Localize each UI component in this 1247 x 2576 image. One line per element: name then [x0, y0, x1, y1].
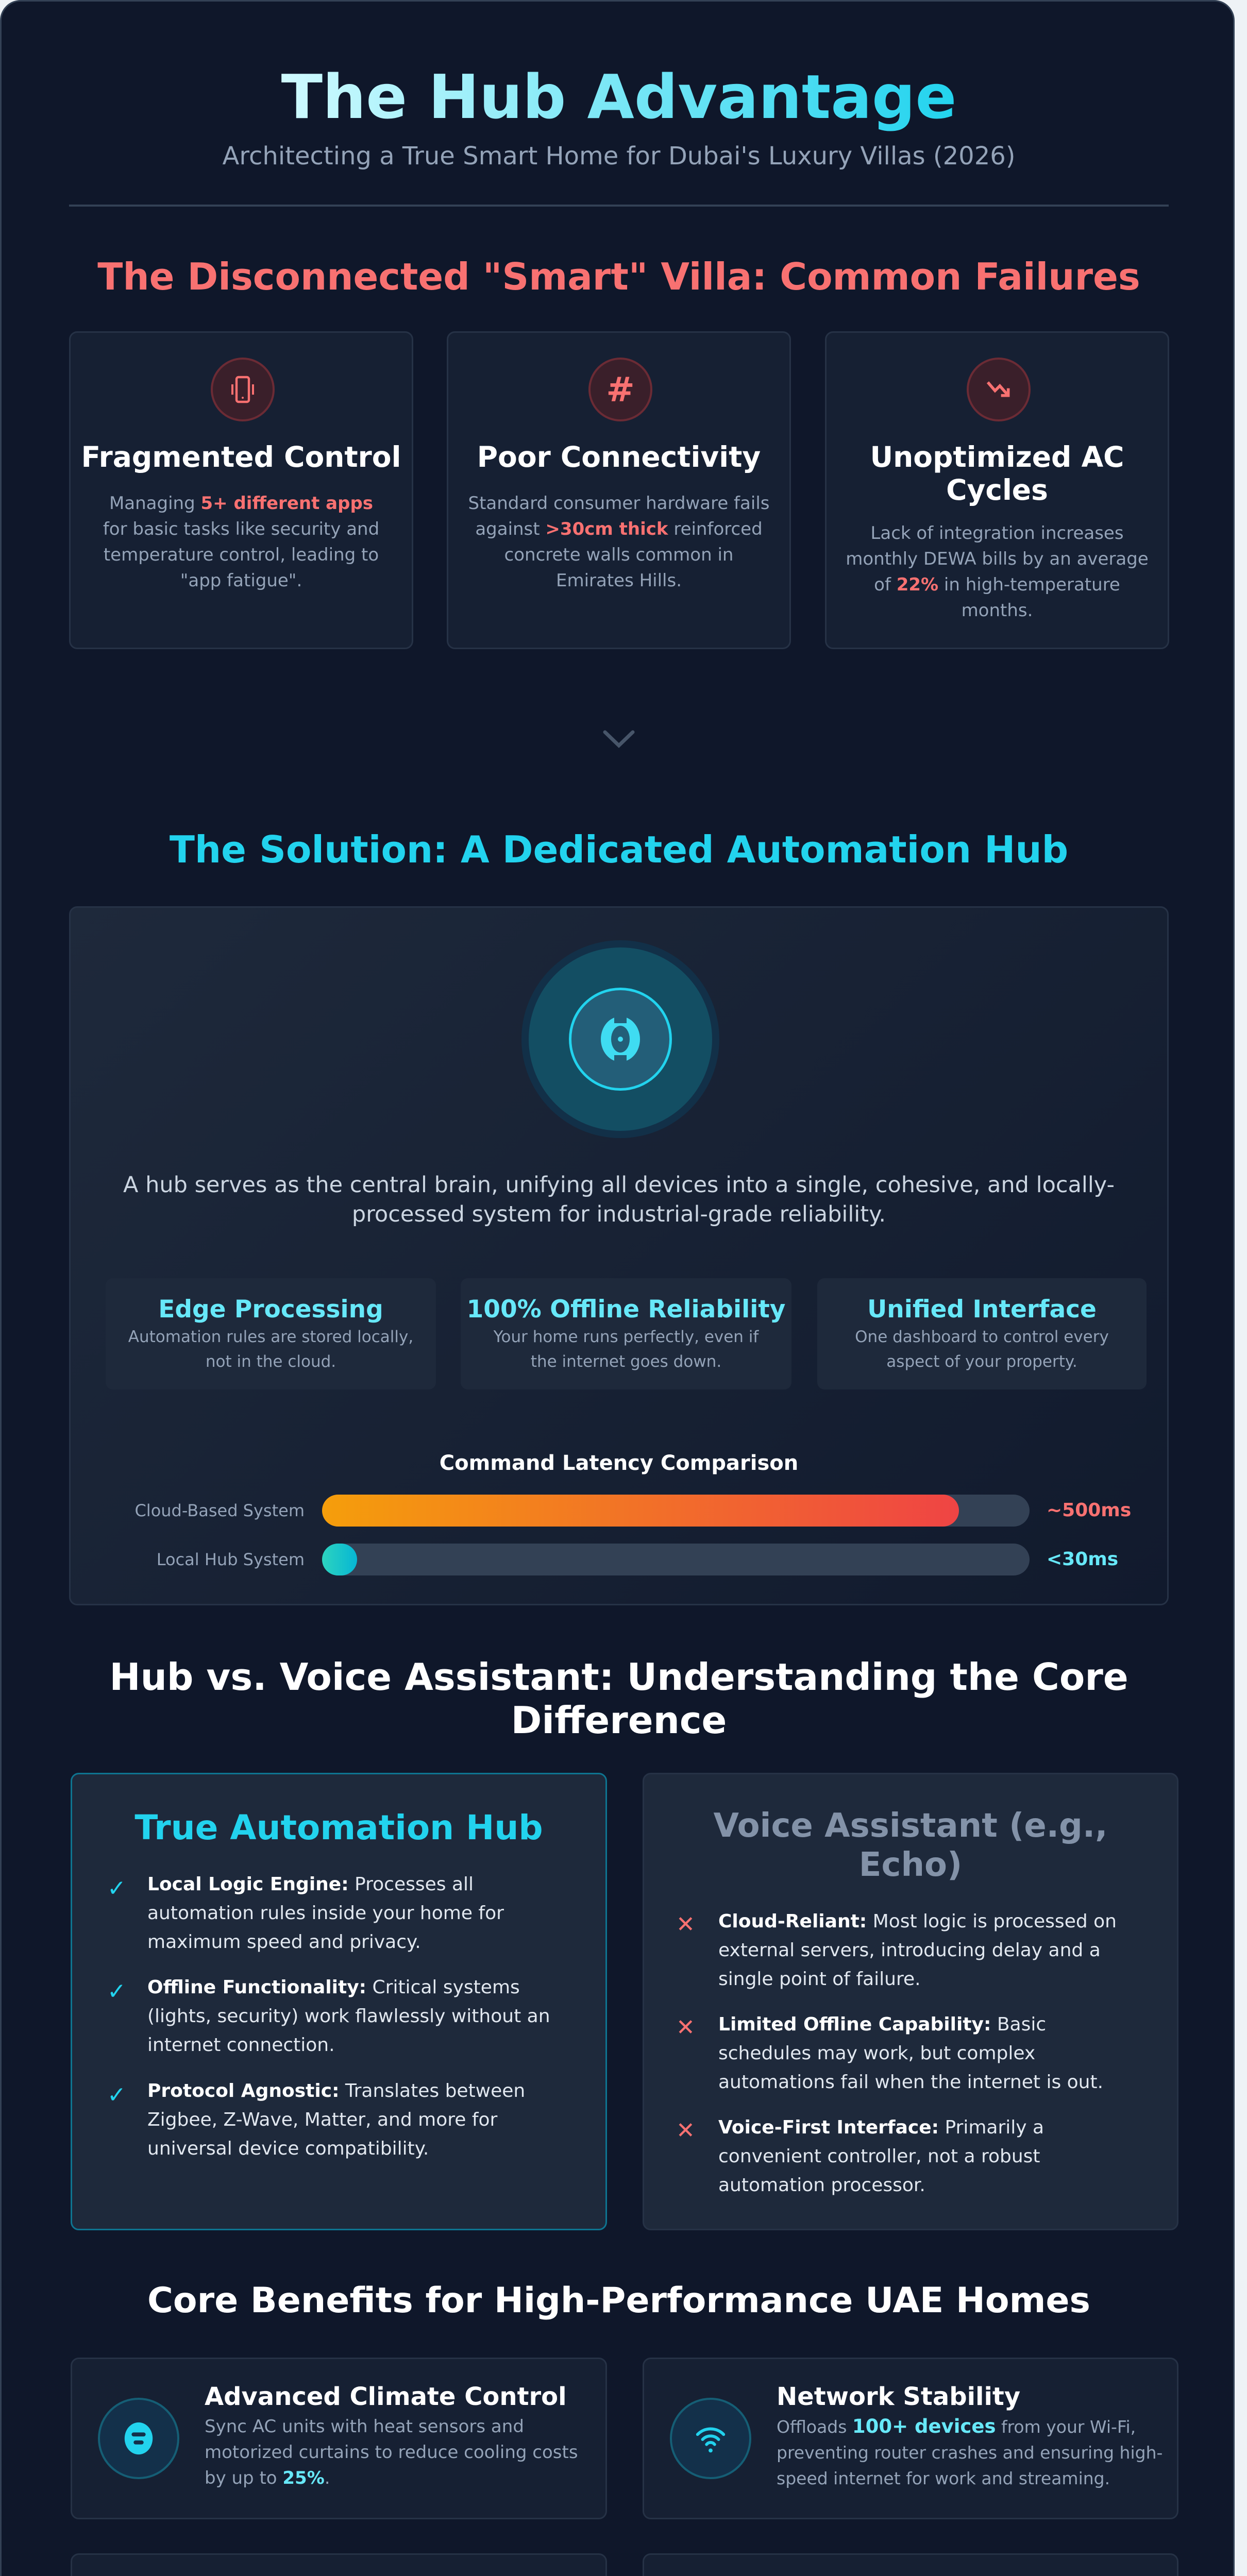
list item: local logic: ✓: [107, 1875, 126, 1902]
chart: latency comparison: [134, 1451, 1131, 1575]
heading: common failures: The Disconnected "Smart" Villa: Common Failures: [97, 255, 1140, 298]
panel: data security: [71, 2553, 607, 2576]
panel: network stability: Offloads 100+ devices from your Wi-Fi,: [777, 2415, 1136, 2437]
panel: network stability: preventing router crashes and ensuring high-: [777, 2443, 1162, 2463]
chart: latency comparison: ~500ms: [1047, 1500, 1131, 1521]
list item: limited offline: ✕: [676, 2014, 695, 2041]
chart: latency comparison: Command Latency Comparison: [440, 1451, 798, 1475]
icon: trend down: [967, 358, 1031, 421]
icon: hash: #: [606, 370, 635, 409]
icon: hash: [588, 358, 652, 421]
chart: latency comparison: Local Hub System: [157, 1550, 305, 1569]
feature: unified interface: [817, 1278, 1147, 1389]
panel: fragmented control: Fragmented Control: [81, 440, 401, 473]
icon: hub: [521, 940, 719, 1138]
heading: solution: The Solution: A Dedicated Automation Hub: [170, 828, 1068, 871]
feature: edge processing: Automation rules are stored locally,: [128, 1328, 413, 1346]
feature: offline reliability: 100% Offline Reliability: [467, 1295, 785, 1324]
list item: protocol: ✓: [107, 2082, 126, 2108]
chart: latency comparison: <30ms: [1047, 1549, 1118, 1570]
panel: unoptimized AC: Unoptimized AC: [870, 440, 1124, 473]
panel: fragmented control: "app fatigue".: [180, 570, 302, 591]
panel: unoptimized AC: months.: [962, 600, 1033, 621]
panel: climate control: motorized curtains to reduce cooling costs: [205, 2442, 578, 2463]
list item: protocol: Protocol Agnostic: Translates between Zigbee, Z-Wave, Matter, and more for universal device compatibility.: [147, 2080, 525, 2159]
feature: unified interface: Unified Interface: [867, 1295, 1097, 1324]
panel: poor connectivity: concrete walls common in: [504, 545, 733, 565]
feature: offline reliability: [461, 1278, 791, 1389]
panel: climate control: Advanced Climate Control: [205, 2382, 567, 2411]
panel: poor connectivity: against >30cm thick reinforced: [475, 519, 763, 539]
icon: climate: [98, 2398, 179, 2479]
panel: fragmented control: temperature control, leading to: [104, 545, 379, 565]
panel: unoptimized AC: Lack of integration increases: [870, 523, 1124, 544]
feature: edge processing: Edge Processing: [158, 1295, 383, 1324]
list item: local logic: Local Logic Engine: Processes all automation rules inside your home for maximum speed and privacy.: [147, 1874, 504, 1953]
heading: hub vs voice: Hub vs. Voice Assistant: Understanding the Core Difference: [109, 1655, 1128, 1742]
panel: fragmented control: [69, 331, 413, 649]
panel: climate control: [71, 2358, 607, 2519]
list item: cloud reliant: ✕: [676, 1911, 695, 1938]
feature: offline reliability: Your home runs perfectly, even if: [494, 1328, 759, 1346]
panel: solution: [69, 906, 1169, 1605]
list item: voice first: Voice-First Interface: Primarily a convenient controller, not a robust automation processor.: [718, 2117, 1044, 2196]
panel: climate control: Sync AC units with heat sensors and: [205, 2416, 524, 2437]
panel: unoptimized AC: monthly DEWA bills by an average: [846, 549, 1149, 569]
feature: unified interface: aspect of your property.: [886, 1352, 1077, 1371]
heading: core benefits: Core Benefits for High-Performance UAE Homes: [147, 2280, 1090, 2321]
arrow: chevron down: [603, 731, 635, 748]
list item: voice first: ✕: [676, 2117, 695, 2144]
list item: offline: ✓: [107, 1978, 126, 2005]
panel: protocols: [643, 2553, 1178, 2576]
feature: unified interface: One dashboard to control every: [855, 1328, 1109, 1346]
icon: wifi: [670, 2398, 751, 2479]
panel: unoptimized AC: of 22% in high-temperature: [874, 574, 1120, 595]
panel: voice assistant: [643, 1773, 1178, 2230]
title: The Hub Advantage: [281, 61, 956, 132]
panel: climate control: by up to 25%.: [205, 2468, 330, 2488]
list item: cloud reliant: Cloud-Reliant: Most logic is processed on external servers, introducing delay and a single point of failure.: [718, 1911, 1117, 1990]
panel: poor connectivity: Poor Connectivity: [477, 440, 761, 473]
text: hub description: processed system for industrial-grade reliability.: [352, 1201, 886, 1227]
panel: fragmented control: for basic tasks like security and: [103, 519, 379, 539]
subtitle: Architecting a True Smart Home for Dubai's Luxury Villas (2026): [223, 142, 1015, 171]
panel: poor connectivity: [447, 331, 791, 649]
panel: true automation hub: [71, 1773, 607, 2230]
panel: fragmented control: Managing 5+ different apps: [109, 493, 373, 514]
panel: voice assistant: Voice Assistant (e.g., Echo): [714, 1807, 1107, 1884]
panel: unoptimized AC: Cycles: [946, 473, 1048, 506]
panel: network stability: [643, 2358, 1178, 2519]
feature: offline reliability: the internet goes down.: [531, 1352, 721, 1371]
icon: phone: [211, 358, 275, 421]
feature: edge processing: [106, 1278, 436, 1389]
panel: network stability: speed internet for work and streaming.: [777, 2468, 1110, 2488]
list item: offline: Offline Functionality: Critical systems (lights, security) work flawlessly without an internet connection.: [147, 1977, 550, 2056]
panel: true automation hub: True Automation Hub: [134, 1808, 543, 1848]
text: hub description: A hub serves as the central brain, unifying all devices into a single, cohesive, and locally-: [123, 1172, 1115, 1198]
text: hub description: [123, 1172, 1115, 1227]
panel: poor connectivity: Emirates Hills.: [556, 570, 682, 591]
panel: unoptimized AC: [825, 331, 1169, 649]
panel: network stability: Network Stability: [777, 2382, 1020, 2411]
chart: latency comparison: Cloud-Based System: [134, 1501, 305, 1520]
list item: limited offline: Limited Offline Capability: Basic schedules may work, but complex automations fail when the internet is out.: [718, 2014, 1103, 2093]
panel: poor connectivity: Standard consumer hardware fails: [468, 493, 769, 514]
feature: edge processing: not in the cloud.: [206, 1352, 336, 1371]
